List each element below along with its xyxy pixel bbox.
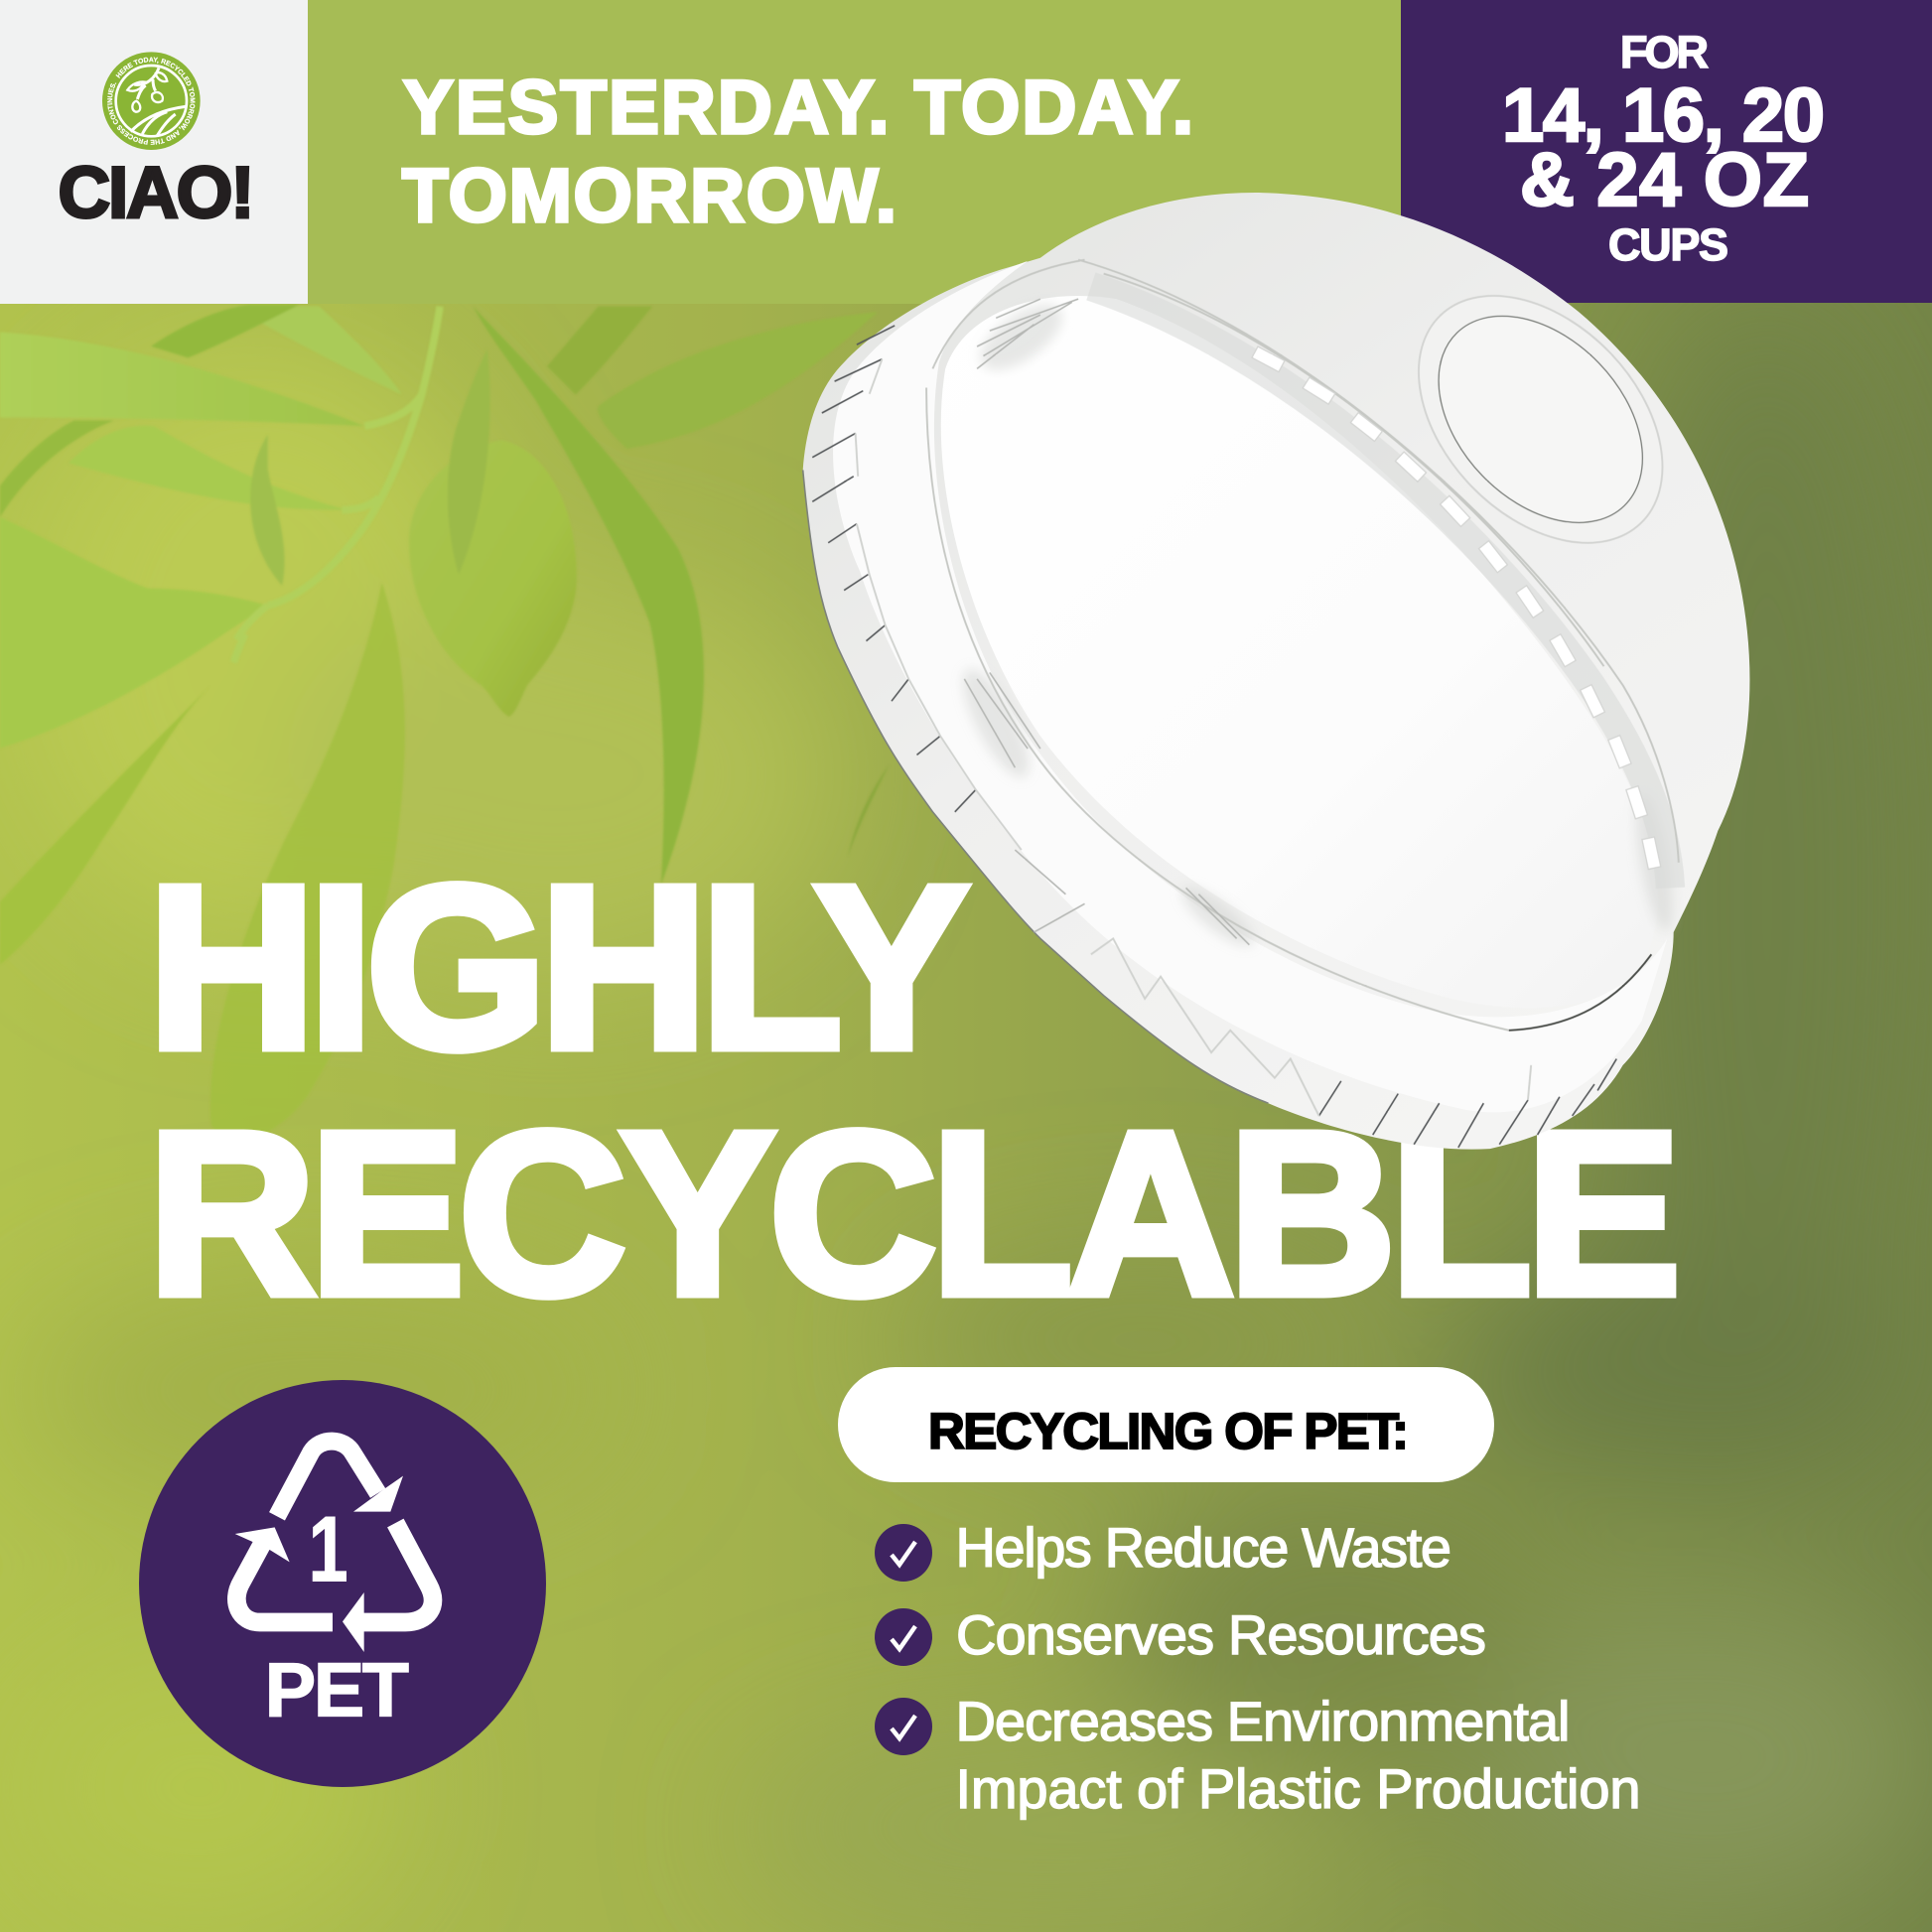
sizes text: FOR — [1620, 27, 1709, 77]
sizes text: CUPS — [1608, 219, 1728, 270]
heading: highly recyclable: RECYCLABLE — [148, 1083, 1681, 1343]
lid silhouette — [803, 193, 1749, 1150]
benefit text — [955, 1690, 1640, 1820]
crinkled reflections — [964, 299, 1249, 945]
benefit: conserves resources: Conserves Resources — [956, 1603, 1486, 1666]
sizes text — [1502, 27, 1825, 270]
sizes text: 14, 16, 20 — [1502, 73, 1825, 158]
olive branch leaves and fruit — [0, 305, 889, 1140]
benefit text: Decreases Environmental — [955, 1690, 1571, 1752]
icon: check — [875, 1524, 932, 1582]
icon: recycling triangle — [235, 1442, 433, 1732]
benefit text: Impact of Plastic Production — [955, 1757, 1640, 1820]
rim band with vent dashes — [926, 260, 1679, 1031]
benefit: helps reduce waste: Helps Reduce Waste — [955, 1516, 1451, 1579]
icon: check — [875, 1608, 932, 1666]
panel: logo — [0, 0, 308, 304]
badge: PET recycling code 1 — [139, 1380, 546, 1787]
sizes text: & 24 OZ — [1520, 138, 1809, 222]
sip button — [1371, 248, 1710, 590]
panel: slogan bar — [308, 0, 1401, 304]
icon: round olive badge: HERE TODAY, RECYCLED TOMORROW, AND THE PROCESS CONTINUES. — [107, 58, 195, 145]
wordmark: CIAO! — [58, 153, 254, 233]
benefit: decreases environmental impact — [875, 1690, 1640, 1820]
soft crinkle shading — [951, 292, 1681, 955]
inner white body — [941, 296, 1658, 1008]
heading: highly recyclable: HIGHLY — [148, 837, 969, 1097]
icon: recycling triangle: PET — [265, 1647, 409, 1732]
slogan: TOMORROW. — [402, 154, 897, 238]
pill heading: recycling of PET: RECYCLING OF PET: — [928, 1403, 1409, 1459]
flange band — [833, 261, 1667, 1112]
slogan — [402, 66, 1193, 238]
icon: recycling triangle: 1 — [309, 1497, 348, 1600]
flange ticks — [812, 326, 1616, 1148]
product: clear dome lid — [803, 193, 1749, 1150]
slogan: YESTERDAY. TODAY. — [403, 66, 1193, 150]
heading: highly recyclable — [148, 837, 1681, 1343]
icon: check — [875, 1698, 932, 1755]
pill heading: recycling of PET — [838, 1367, 1494, 1482]
panel: cup sizes — [1401, 0, 1932, 303]
